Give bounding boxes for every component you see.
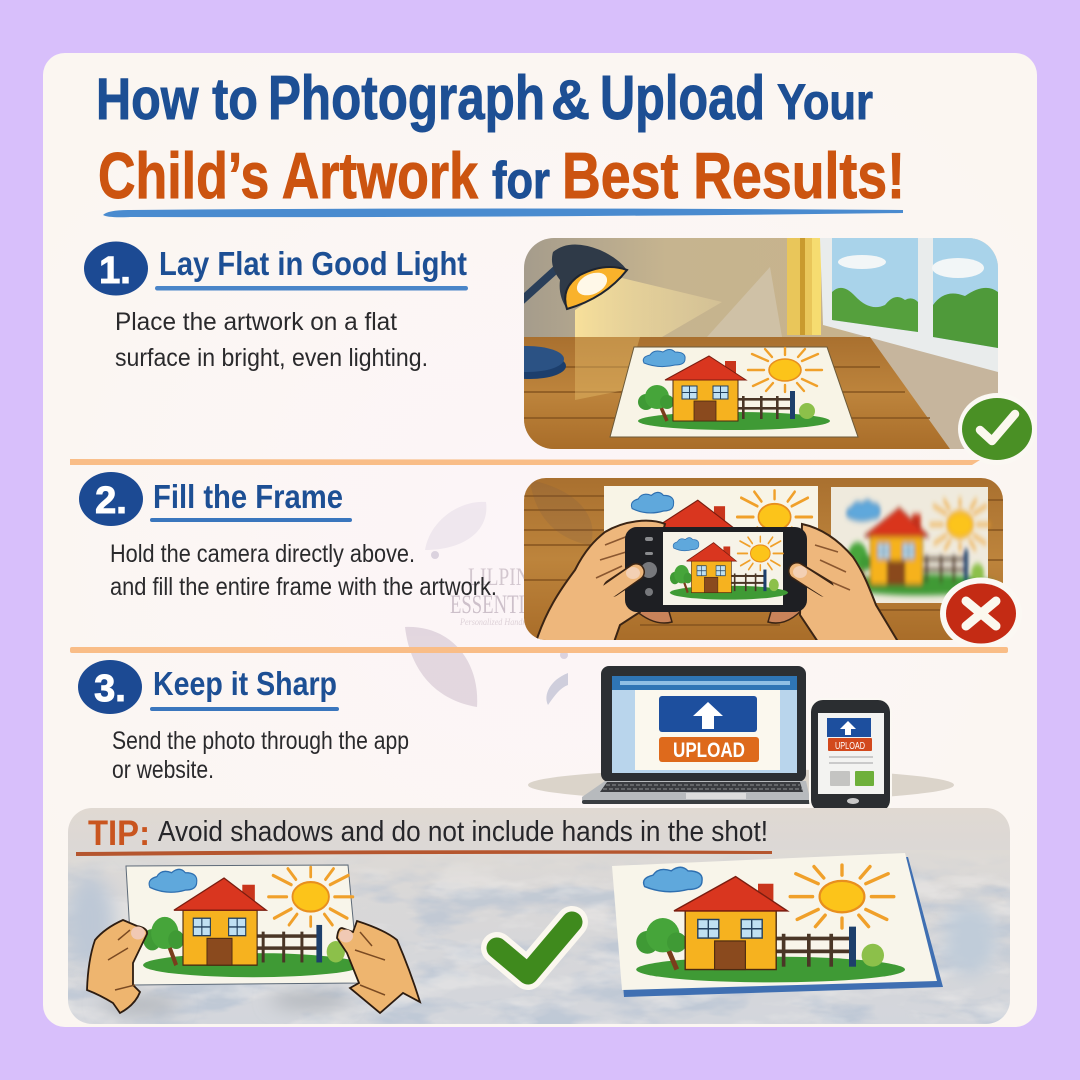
title: Child’s Artwork (98, 139, 479, 212)
phone (625, 527, 807, 612)
step 1: body text: Place the artwork on a flat (115, 308, 397, 336)
step 3: body text: Send the photo through the app (112, 727, 409, 755)
tip text: Avoid shadows and do not include hands in the shot! (158, 816, 768, 848)
step 2: body text: and fill the entire frame with the artwork. (110, 573, 497, 601)
heading: keep it sharp: Keep it Sharp (153, 665, 337, 702)
watermark shade on wood (530, 480, 592, 545)
step 1: body text (115, 308, 428, 372)
step 3: body text (112, 727, 409, 784)
curtain (787, 238, 821, 335)
divider 2 (70, 647, 1008, 653)
phone with upload screen (809, 698, 892, 815)
step 1: heading block (84, 242, 468, 296)
right hand (337, 921, 420, 1013)
step 2: body text (110, 540, 497, 601)
flat artwork without hands (612, 853, 943, 997)
heading: fill the frame: Fill the Frame (153, 478, 343, 515)
window (820, 238, 998, 372)
title: Best Results! (562, 139, 905, 212)
title: for (492, 152, 550, 210)
number badge 3: 3. (94, 668, 126, 710)
tip underline (76, 850, 772, 856)
upload arrow button (659, 696, 757, 732)
number badge 2: 2. (95, 480, 127, 522)
heading underline (150, 518, 352, 522)
upload label button: UPLOAD (673, 739, 745, 762)
child's artwork on desk (610, 347, 858, 437)
number badge 2 (79, 472, 143, 526)
number badge 1: 1. (99, 250, 131, 292)
illustration: desk with lamp and window (490, 238, 998, 449)
watermark: logo: Personalized Handmade (459, 617, 540, 627)
heading: lay flat: Lay Flat in Good Light (159, 245, 467, 282)
watermark: logo: LILPINA (468, 564, 544, 591)
title: Photograph (268, 64, 545, 133)
watermark: logo (405, 502, 568, 707)
step 3: heading block (78, 660, 339, 714)
panel: tip (66, 808, 1010, 1024)
step 1: body text: surface in bright, even lighting. (115, 344, 428, 372)
right hand (768, 524, 900, 645)
thumbs (596, 566, 842, 600)
heading underline (150, 707, 339, 711)
heading underline (155, 286, 468, 290)
wall light patch (707, 267, 782, 337)
step 2: heading block (79, 472, 352, 526)
step 2: body text: Hold the camera directly above. (110, 540, 415, 568)
keyboard base (582, 781, 811, 803)
lamp (524, 244, 628, 379)
divider 1 (70, 459, 980, 465)
blurred right artwork (831, 487, 996, 603)
number badge 1 (84, 242, 148, 296)
title (96, 64, 905, 212)
desk (524, 337, 950, 449)
number badge 3 (78, 660, 142, 714)
floor (820, 320, 998, 449)
left hand (87, 920, 147, 1013)
tip label: TIP: (88, 814, 150, 853)
phone with upload screen: UPLOAD (835, 741, 865, 752)
lamp light beam (575, 278, 722, 337)
badge: green check (958, 393, 1036, 465)
large check mark (497, 922, 572, 974)
title: Your (777, 74, 873, 130)
badge: red cross (940, 578, 1022, 650)
step 3: body text: or website. (112, 756, 214, 784)
artwork held by hands (87, 865, 420, 1013)
devices ground shadow (528, 769, 954, 801)
left hand (535, 521, 672, 645)
left artwork (604, 486, 818, 532)
title: How to (96, 67, 258, 132)
title: Upload (600, 64, 765, 133)
watermark: logo: ESSENTIALS (450, 590, 560, 619)
laptop with upload screen (582, 666, 812, 804)
illustration: phone held over artwork (524, 478, 1003, 645)
title underline (103, 208, 903, 217)
title: & (551, 68, 590, 131)
